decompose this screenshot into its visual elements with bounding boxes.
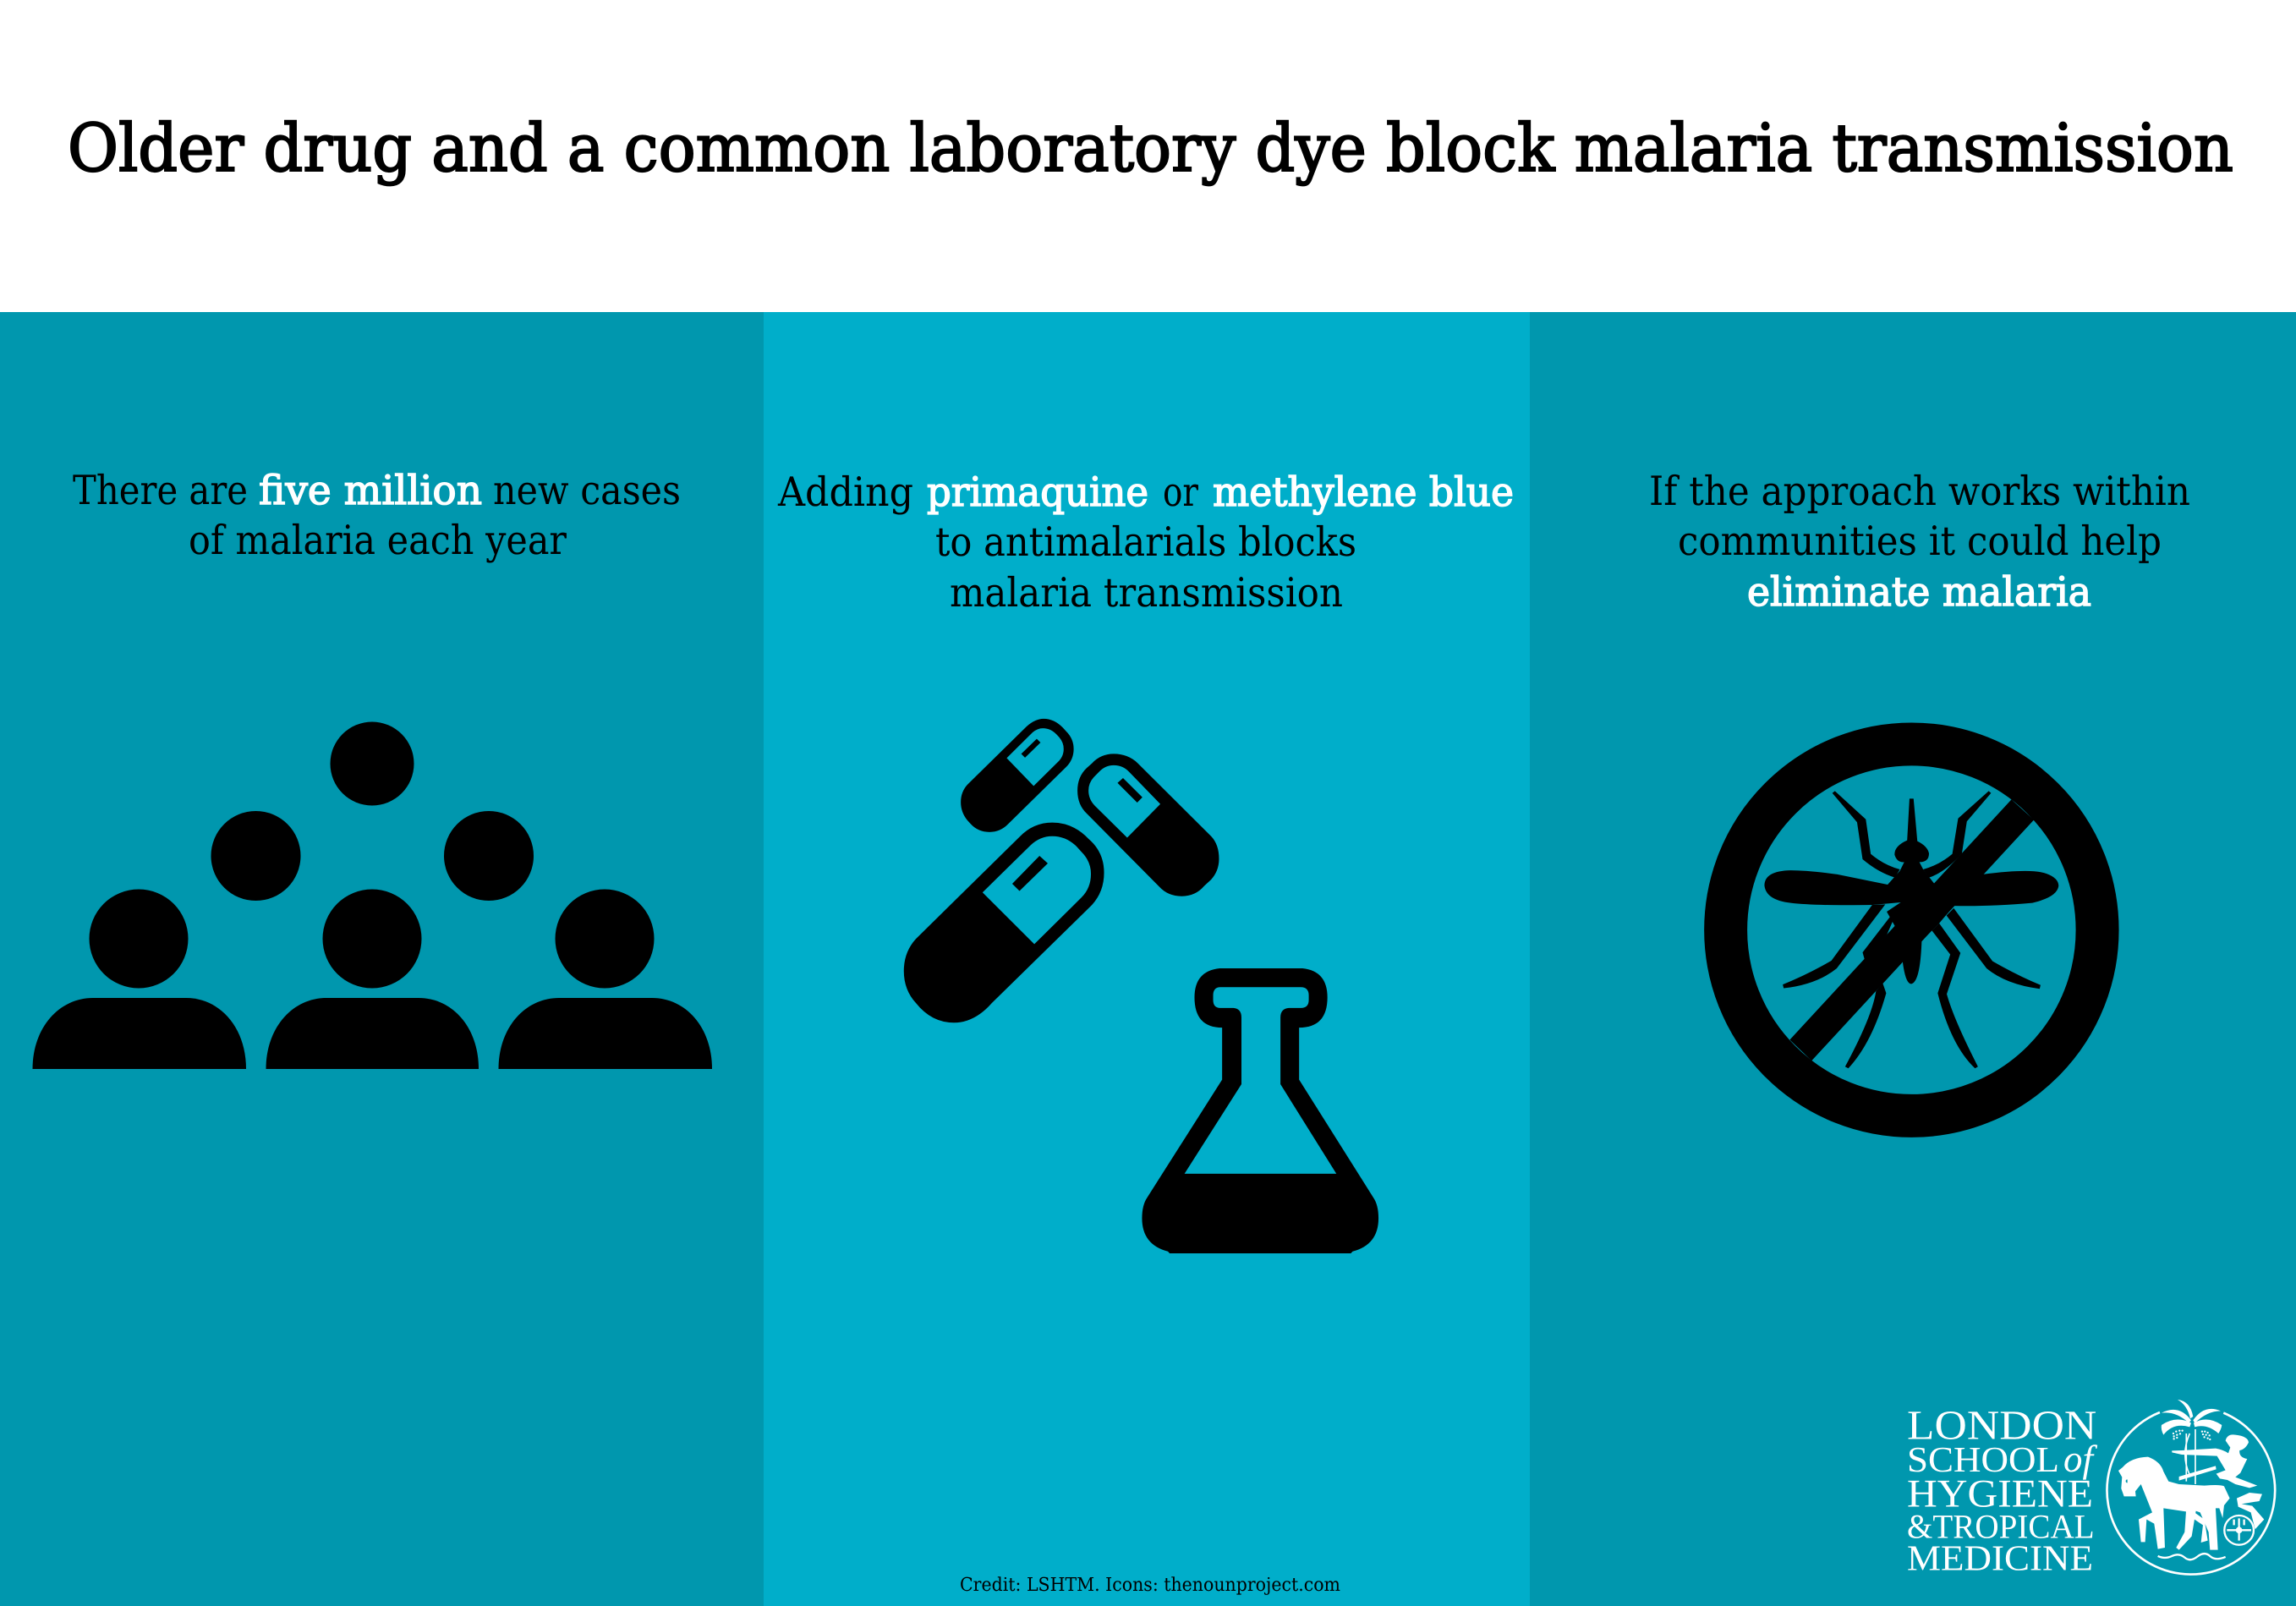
text: five million new cases: five million [259, 468, 482, 514]
logo wordmark: MEDICINE [1907, 1538, 2093, 1578]
text: primaquine or methylene blue: methylene blue [1213, 469, 1514, 516]
credit: Credit: LSHTM. Icons: thenounproject.com [960, 1575, 1340, 1596]
text: eliminate malaria: eliminate malaria [1747, 569, 2091, 616]
text: eliminate malaria: communities it could help [1678, 518, 2162, 565]
panel: treatment [764, 312, 1530, 1606]
logo wordmark: &TROPICAL [1907, 1508, 2095, 1545]
text: five million new cases [73, 468, 681, 564]
icon: small capsule [961, 719, 1074, 832]
icon: no mosquito [1726, 744, 2097, 1115]
icon: group of people [32, 722, 712, 1069]
logo wordmark: of [2063, 1438, 2097, 1480]
panel: elimination [1530, 312, 2296, 1606]
text: eliminate malaria [1649, 469, 2190, 616]
icon: flask [1142, 968, 1378, 1253]
logo: LSHTM [1907, 1400, 2275, 1578]
text: primaquine or methylene blue: or [1163, 469, 1199, 516]
text: primaquine or methylene blue: Adding [777, 469, 913, 516]
seal: charioteer [2172, 1434, 2264, 1529]
text: eliminate malaria: If the approach works within [1649, 469, 2190, 515]
icon: large capsule [904, 823, 1104, 1022]
text: primaquine or methylene blue: to antimalarials blocks [935, 519, 1356, 566]
title: Older drug and a common laboratory dye block malaria transmission [68, 111, 2233, 187]
icon: prohibition sign [1726, 744, 2097, 1115]
text: five million new cases: new cases [493, 468, 681, 514]
text: primaquine or methylene blue [777, 469, 1514, 617]
logo wordmark: SCHOOL [1907, 1439, 2059, 1479]
text: primaquine or methylene blue: primaquine [927, 469, 1148, 516]
seal: chariot wheel [2224, 1516, 2254, 1545]
logo seal [2107, 1400, 2275, 1575]
text: primaquine or methylene blue: malaria transmission [950, 570, 1343, 617]
text: five million new cases: of malaria each year [189, 518, 567, 564]
logo wordmark [1907, 1402, 2097, 1578]
icon: mosquito [1764, 791, 2058, 1068]
seal: horse [2118, 1457, 2230, 1550]
icon: capsules [904, 719, 1378, 1253]
seal: palm tree [2162, 1400, 2222, 1484]
seal: serpent [2158, 1554, 2226, 1559]
logo wordmark: LONDON [1907, 1402, 2096, 1448]
text: five million new cases: There are [73, 468, 248, 514]
logo wordmark: HYGIENE [1907, 1472, 2093, 1516]
icon: right capsule [1077, 754, 1219, 896]
panel: cases [0, 312, 764, 1606]
